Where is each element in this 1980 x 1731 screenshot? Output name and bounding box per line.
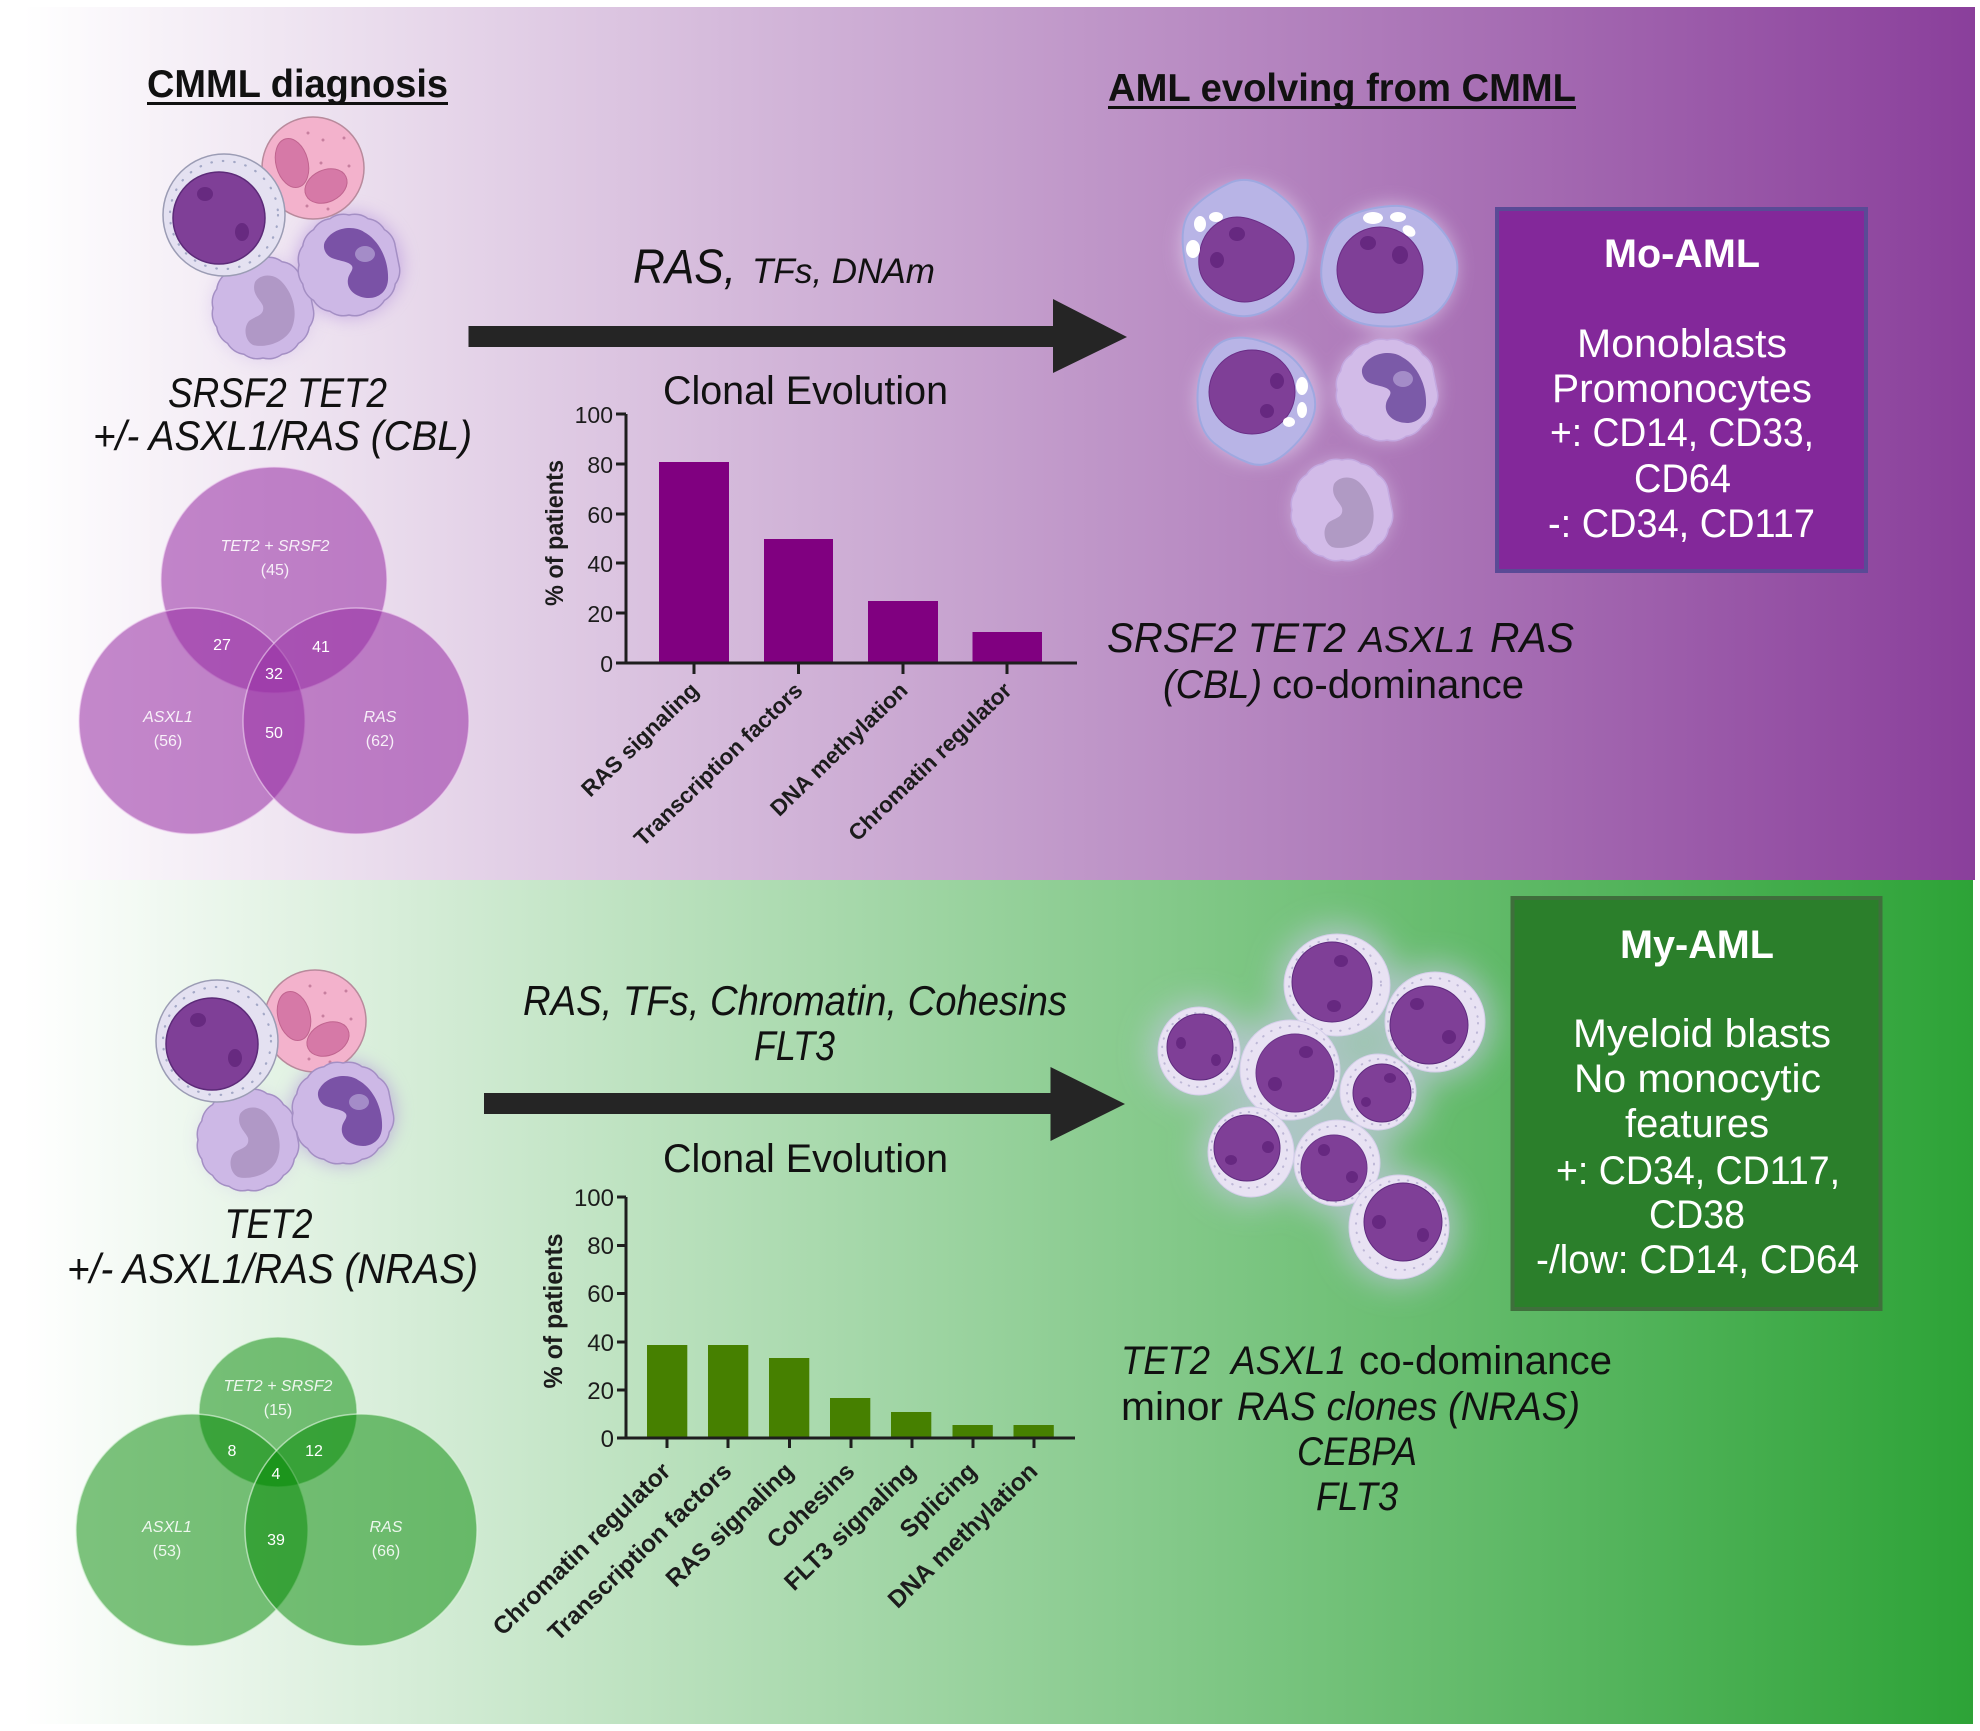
venn diagram: CMML green: 12 [305, 1443, 323, 1460]
venn diagram: CMML purple: TET2 + SRSF2 [221, 538, 330, 555]
text: AML mutations, co-dominance: co-dominance [1272, 663, 1524, 707]
blast 3 [1158, 1007, 1240, 1095]
cell glow [1181, 184, 1456, 558]
bar chart: clonal evolution in My-AML: 100 [574, 1185, 614, 1212]
monoblast B [1321, 206, 1457, 327]
bar chart: clonal evolution in Mo-AML: 80 [587, 452, 613, 478]
monoblast A [1183, 180, 1308, 316]
bar chart: clonal evolution in My-AML: 80 [587, 1233, 614, 1260]
box: Mo-AML: Monoblasts [1577, 322, 1787, 366]
box: Mo-AML [1497, 209, 1866, 571]
icon: CMML cell cluster [163, 117, 401, 359]
label: mutations gained [523, 977, 1067, 1069]
panel: CMML to Mo-AML (purple) [0, 7, 1975, 880]
bar chart: clonal evolution in Mo-AML: % of patients [541, 460, 569, 606]
venn diagram: CMML purple: (45) [261, 562, 289, 579]
bar chart: clonal evolution in My-AML: Splicing [895, 1458, 982, 1544]
heading: AML evolving from CMML: AML evolving from CMML [1108, 67, 1576, 110]
text: AML mutations, co-dominance: ASXL1 [1229, 1339, 1346, 1383]
bar chart: clonal evolution in Mo-AML: Chromatin regulator [844, 677, 1017, 846]
blast 4 [1240, 1020, 1340, 1120]
label: mutations gained: RAS, TFs, Chromatin, Cohesins [523, 977, 1067, 1024]
venn diagram: CMML purple: (56) [154, 733, 182, 750]
chart title: Clonal Evolution: Clonal Evolution [663, 369, 948, 413]
venn diagram: CMML green: (66) [372, 1543, 400, 1560]
blast 8 [1349, 1175, 1449, 1279]
bar chart: clonal evolution in Mo-AML: 0 [600, 651, 613, 677]
venn diagram: CMML green: 4 [272, 1466, 281, 1483]
bar chart: clonal evolution in Mo-AML: 20 [587, 601, 613, 627]
label: mutations gained, RAS TFs DNAm: TFs, DNAm [752, 252, 935, 291]
text: AML mutations, co-dominance: CEBPA [1297, 1430, 1417, 1474]
box: My-AML: My-AML [1620, 923, 1774, 967]
text: AML mutations, co-dominance: RAS clones (NRAS) [1237, 1385, 1580, 1429]
promonocyte [1336, 339, 1438, 441]
bar chart: clonal evolution in Mo-AML: DNA methylation [765, 678, 912, 821]
venn diagram: CMML purple [79, 467, 469, 834]
text: AML mutations, co-dominance: TET2 [1121, 1339, 1210, 1383]
bar chart: clonal evolution in Mo-AML: 40 [587, 551, 613, 577]
box: My-AML: CD38 [1649, 1193, 1745, 1237]
bar chart: clonal evolution in My-AML: FLT3 signaling [779, 1458, 921, 1596]
text: AML mutations, co-dominance [1107, 614, 1574, 707]
box: My-AML: -/low: CD14, CD64 [1536, 1238, 1859, 1282]
bar chart: clonal evolution in Mo-AML: 100 [575, 402, 613, 428]
venn diagram: CMML green: RAS [370, 1519, 403, 1536]
text: CMML diagnosis mutations: SRSF2 TET2 [168, 369, 387, 416]
text: AML mutations, co-dominance: minor [1121, 1385, 1223, 1429]
label: mutations gained, RAS TFs DNAm: RAS, [633, 241, 736, 294]
text: CMML mutations [67, 1200, 478, 1292]
box: Mo-AML: Promonocytes [1552, 367, 1812, 411]
box: Mo-AML: Mo-AML [1604, 232, 1760, 276]
venn diagram: CMML green [76, 1337, 477, 1646]
venn diagram: CMML purple: (62) [366, 733, 394, 750]
bar chart: clonal evolution in My-AML: 40 [587, 1330, 614, 1357]
monoblast C [1197, 338, 1315, 465]
text: AML mutations, co-dominance: ASXL1 [1357, 619, 1476, 660]
venn diagram: CMML purple: 32 [265, 666, 283, 683]
label: mutations gained, RAS TFs DNAm [633, 241, 935, 294]
icon: Mo-AML cell cluster [1181, 180, 1457, 561]
chart title: Clonal Evolution: Clonal Evolution [663, 1137, 948, 1181]
venn diagram: CMML green: (53) [153, 1543, 181, 1560]
bar chart: clonal evolution in My-AML: 60 [587, 1281, 614, 1308]
bar chart: clonal evolution in My-AML: Transcription factors [543, 1458, 737, 1647]
bar chart: clonal evolution in Mo-AML: RAS signaling [576, 678, 703, 802]
arrow: evolution to My-AML [484, 1067, 1125, 1141]
box: My-AML: Myeloid blasts [1573, 1012, 1831, 1056]
venn diagram: CMML purple: RAS [364, 709, 397, 726]
blast 1 [1284, 934, 1390, 1036]
box: My-AML: features [1625, 1102, 1769, 1146]
label: mutations gained: FLT3 [754, 1022, 835, 1069]
bar chart: clonal evolution in Mo-AML: Transcription factors [629, 678, 807, 851]
text: CMML mutations: TET2 [224, 1200, 312, 1247]
bar chart: clonal evolution in My-AML: 20 [587, 1378, 614, 1405]
bar chart: clonal evolution in My-AML: Cohesins [762, 1458, 860, 1554]
text: AML mutations, co-dominance: RAS [1490, 614, 1574, 661]
box: Mo-AML: CD64 [1634, 457, 1731, 501]
venn diagram: CMML green: TET2 + SRSF2 [224, 1378, 333, 1395]
arrow: evolution to Mo-AML [468, 299, 1127, 373]
box: My-AML: +: CD34, CD117, [1556, 1149, 1840, 1193]
bar chart: clonal evolution in My-AML: 0 [601, 1426, 614, 1453]
text: AML mutations, co-dominance: SRSF2 TET2 [1107, 614, 1346, 661]
panel: CMML to My-AML (green) [0, 880, 1973, 1724]
text: CMML diagnosis mutations: +/- ASXL1/RAS (CBL) [93, 412, 472, 459]
bar chart: clonal evolution in My-AML: % of patients [538, 1234, 568, 1388]
venn diagram: CMML purple: 27 [213, 637, 231, 654]
venn diagram: CMML purple: ASXL1 [142, 709, 193, 726]
blast 7 [1294, 1120, 1380, 1206]
box: My-AML [1512, 898, 1880, 1309]
venn diagram: CMML green: (15) [264, 1402, 292, 1419]
bar chart: clonal evolution in My-AML [488, 1185, 1075, 1647]
box: My-AML: No monocytic [1574, 1057, 1821, 1101]
text: CMML diagnosis mutations [93, 369, 472, 459]
bar chart: clonal evolution in Mo-AML [541, 402, 1077, 851]
blast 2 [1385, 972, 1485, 1072]
cell glow [1149, 925, 1493, 1285]
icon: CMML cell cluster [156, 970, 395, 1191]
venn diagram: CMML green: ASXL1 [141, 1519, 192, 1536]
text: CMML mutations: +/- ASXL1/RAS (NRAS) [67, 1245, 478, 1292]
panel background: purple gradient [0, 7, 1975, 880]
monocyte [1291, 459, 1393, 561]
text: AML mutations, co-dominance [1121, 1339, 1612, 1519]
box: Mo-AML: +: CD14, CD33, [1550, 411, 1814, 455]
venn diagram: CMML green: 39 [267, 1532, 285, 1549]
venn diagram: CMML purple: 41 [312, 639, 330, 656]
bar chart: clonal evolution in My-AML: RAS signaling [661, 1458, 799, 1593]
box: Mo-AML: -: CD34, CD117 [1548, 502, 1815, 546]
text: AML mutations, co-dominance: FLT3 [1316, 1475, 1398, 1519]
panel background: green gradient [0, 880, 1973, 1724]
bar chart: clonal evolution in Mo-AML: 60 [587, 502, 613, 528]
venn diagram: CMML purple: 50 [265, 725, 283, 742]
venn diagram: CMML green: 8 [228, 1443, 237, 1460]
bar chart: clonal evolution in My-AML: DNA methylation [883, 1458, 1043, 1614]
text: AML mutations, co-dominance: (CBL) [1163, 663, 1262, 707]
icon: My-AML myeloid blast cluster [1149, 925, 1493, 1285]
blast 5 [1340, 1054, 1416, 1130]
bar chart: clonal evolution in My-AML: Chromatin regulator [488, 1458, 676, 1641]
text: AML mutations, co-dominance: co-dominance [1359, 1339, 1612, 1383]
heading: CMML diagnosis: CMML diagnosis [147, 63, 448, 106]
blast 6 [1208, 1107, 1294, 1197]
